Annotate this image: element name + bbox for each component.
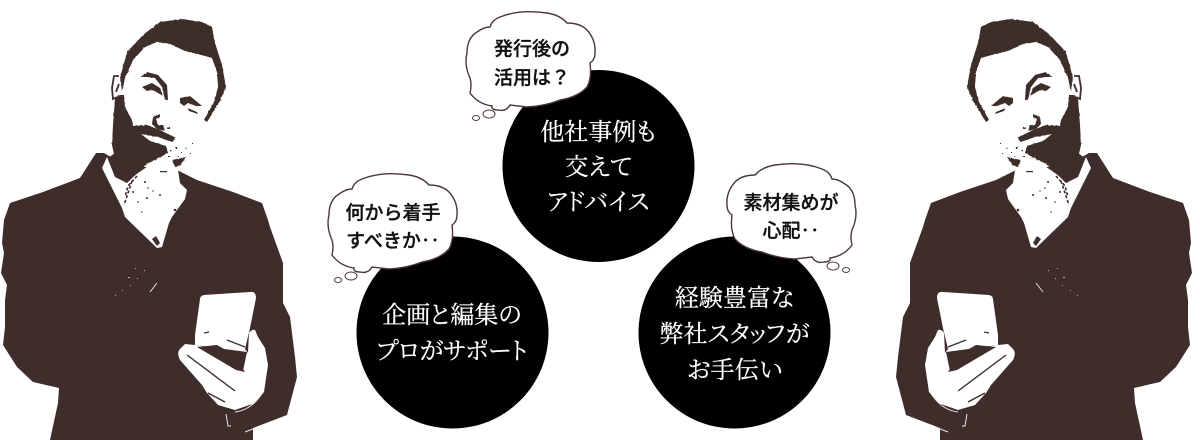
knuckle specks [132, 171, 176, 213]
speckled tie [124, 176, 137, 205]
jacket silhouette [1, 153, 297, 440]
finger lines [187, 332, 245, 402]
stubble [168, 143, 193, 157]
tie tip [152, 236, 160, 246]
nose [152, 114, 170, 131]
jacket specks [115, 268, 145, 296]
figure: thinking man with smartphone (left) [1, 19, 297, 440]
figure: thinking man with smartphone (right, mirrored) [896, 19, 1192, 440]
thought bubble: gathering materials [727, 164, 856, 272]
hand holding phone [178, 330, 268, 410]
thought bubble: where to start: 何から着手 [345, 202, 441, 224]
circle: advice using other company cases: 交えて [565, 154, 631, 181]
circle: experienced staff help: 経験豊富な [675, 285, 794, 312]
shirt collar and fist [102, 157, 187, 248]
circle: advice using other company cases [502, 70, 694, 262]
thought bubble: where to start: すべきか‥ [346, 230, 440, 252]
shadow between phone and fingers [197, 332, 249, 372]
circle: advice using other company cases: 他社事例も [540, 119, 656, 146]
neck shadow [108, 148, 138, 183]
circle: planning and editing pros [356, 236, 548, 428]
chin patch [172, 157, 186, 167]
ear [112, 76, 119, 99]
thought bubble: gathering materials: 心配‥ [762, 220, 820, 242]
circle: planning and editing pros: 企画と編集の [382, 302, 522, 329]
right eyebrow and eye [180, 96, 202, 114]
circle: advice using other company cases: アドバイス [547, 190, 649, 216]
circle: experienced staff help: お手伝い [686, 357, 783, 384]
thought bubble: after publication: 活用は？ [494, 67, 570, 89]
thought bubble: after publication: 発行後の [494, 38, 570, 60]
head: hair and beard [112, 19, 226, 176]
circle: experienced staff help: 弊社スタッフが [660, 321, 810, 348]
left eye [142, 83, 163, 96]
thought bubble: where to start [328, 174, 457, 282]
phone [195, 292, 256, 352]
left eyebrow [140, 72, 168, 100]
thought bubble: after publication [466, 12, 595, 121]
circle: planning and editing pros: プロがサポート [376, 339, 528, 365]
beard [112, 95, 176, 176]
cuff and pocket marks [150, 283, 263, 432]
thought bubble: gathering materials: 素材集めが [743, 192, 839, 214]
circle: experienced staff help [638, 236, 830, 428]
collar crescent [122, 153, 133, 170]
hair [120, 19, 226, 122]
